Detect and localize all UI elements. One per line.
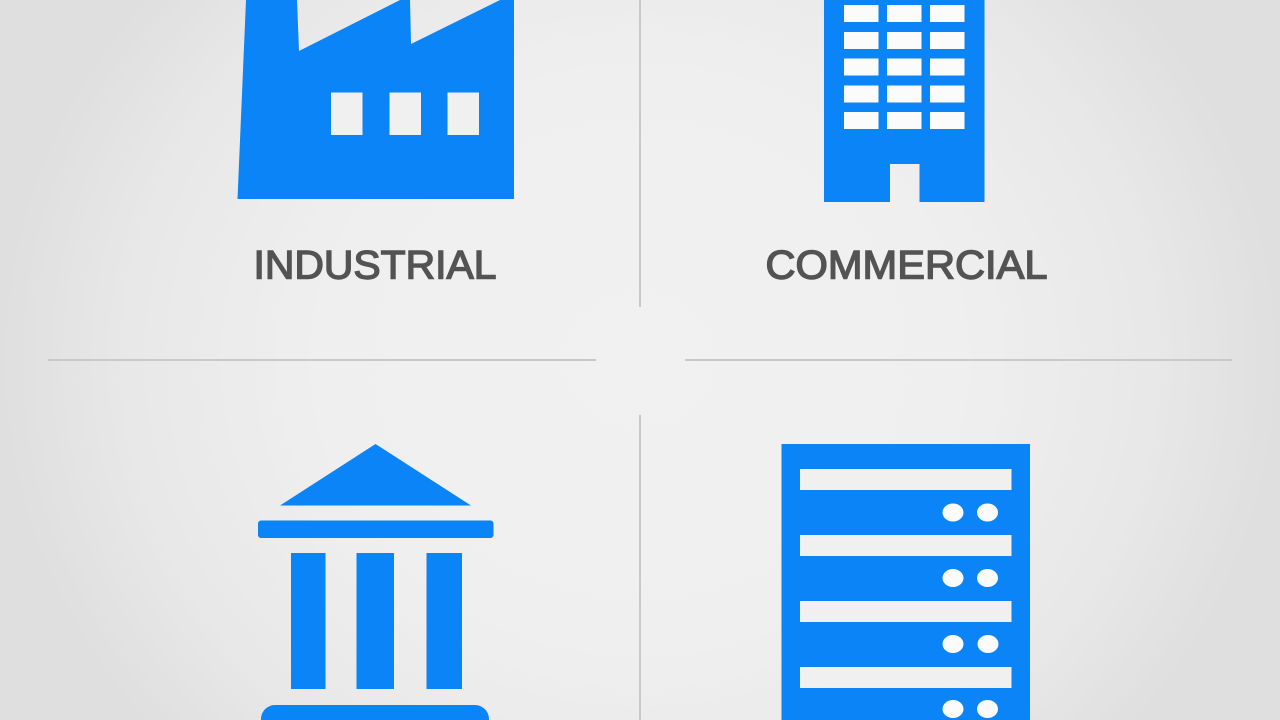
label: industrial: INDUSTRIAL [254,244,496,288]
panel: industrial [238,0,514,288]
panel: data center [782,444,1030,720]
label: commercial: COMMERCIAL [766,244,1048,288]
panel: government [258,444,494,720]
icon: columned building [258,444,494,720]
panel: commercial [766,0,1048,288]
icon: factory [238,0,514,199]
icon: server rack [782,444,1030,720]
icon: office building [824,0,984,202]
